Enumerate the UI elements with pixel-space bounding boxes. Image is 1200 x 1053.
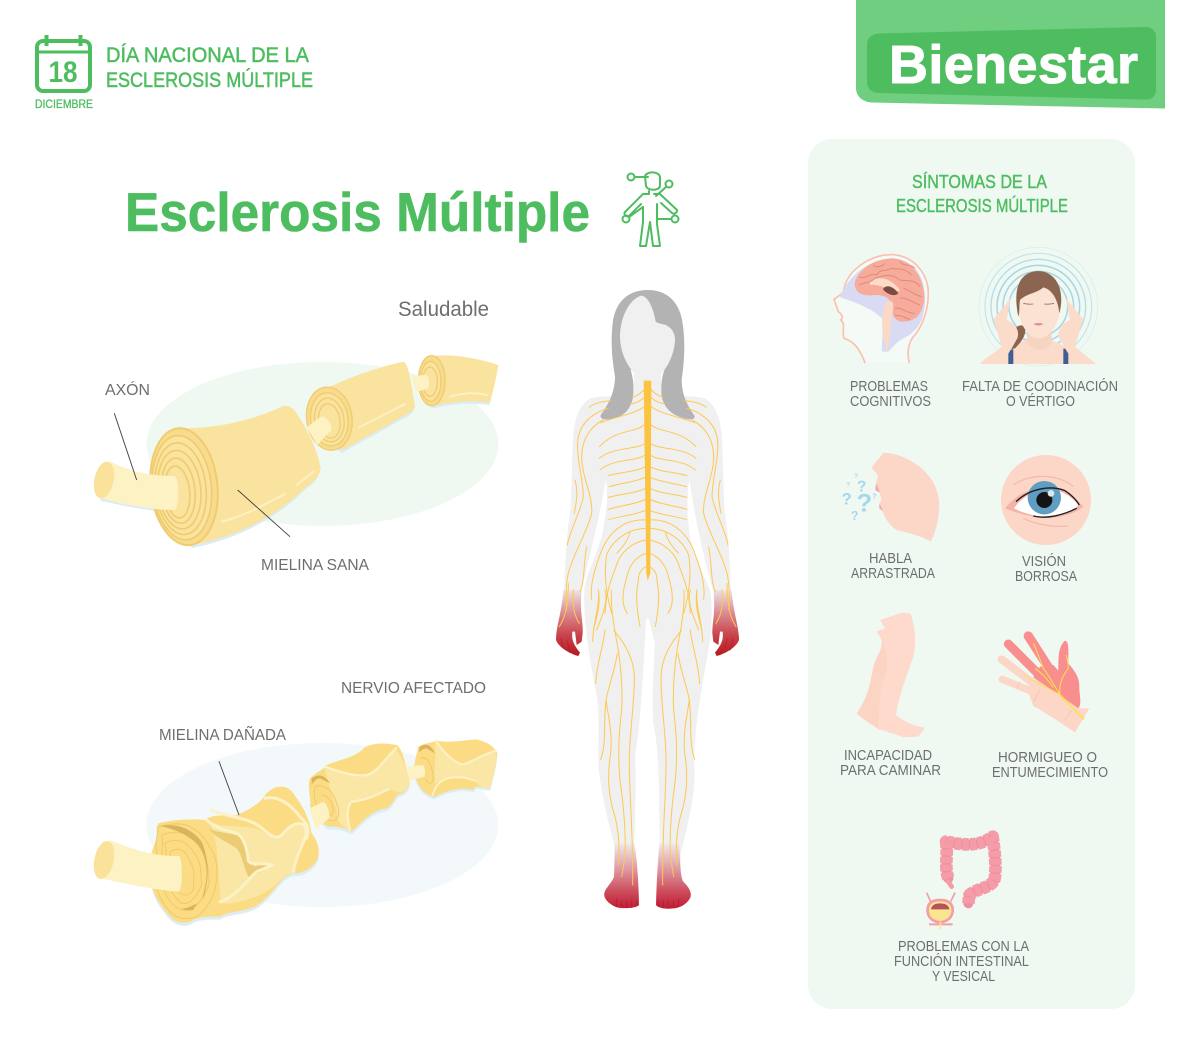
spine	[644, 381, 651, 581]
illustration: damaged nerve	[91, 739, 498, 926]
logo: Bienestar tab: Bienestar	[889, 35, 1138, 95]
icon: slurred speech: ?	[854, 473, 858, 480]
label: affected nerve: NERVIO AFECTADO	[341, 680, 486, 697]
panel: symptoms	[808, 139, 1135, 1009]
illustration: female body with nervous system	[556, 290, 739, 909]
arm nerves	[589, 401, 611, 407]
icon: blurred eye	[1001, 455, 1091, 545]
label: blurred vision: VISIÓN	[1022, 553, 1066, 570]
label: bowel and bladder: PROBLEMAS CON LA	[898, 938, 1029, 955]
label: slurred speech	[851, 550, 935, 582]
label: inability to walk	[840, 747, 941, 779]
label: coordination or vertigo: FALTA DE COODINACIÓN	[962, 378, 1118, 395]
face	[620, 296, 675, 380]
label: bowel and bladder	[894, 938, 1029, 985]
label: inability to walk: INCAPACIDAD	[844, 747, 932, 764]
label: tingling or numbness: HORMIGUEO O	[998, 749, 1097, 766]
feet	[604, 843, 639, 908]
label: month: DICIEMBRE	[35, 97, 93, 111]
heading: national day: ESCLEROSIS MÚLTIPLE	[106, 69, 313, 92]
segment 2	[309, 747, 410, 835]
body silhouette	[564, 373, 731, 873]
icon: slurred speech: ?	[842, 490, 852, 509]
icon: colon and bladder	[927, 837, 995, 929]
label: blurred vision	[1015, 553, 1077, 585]
segment 1	[176, 409, 319, 548]
label: bowel and bladder: Y VESICAL	[932, 968, 995, 985]
icon: slurred speech	[842, 453, 939, 542]
label: damaged myelin: MIELINA DAÑADA	[159, 724, 286, 744]
label: cognitive problems: COGNITIVOS	[850, 393, 931, 410]
panel heading: SÍNTOMAS DE LA	[912, 172, 1047, 192]
label: coordination or vertigo: O VÉRTIGO	[1006, 393, 1075, 410]
segment 1	[150, 790, 319, 926]
header: awareness day	[35, 35, 313, 111]
segment 3	[422, 358, 498, 408]
title: Esclerosis Múltiple	[125, 181, 590, 243]
icon: slurred speech: ?	[857, 478, 866, 495]
label: healthy myelin: MIELINA SANA	[261, 557, 369, 574]
panel heading	[896, 172, 1068, 216]
label: coordination or vertigo	[962, 378, 1118, 410]
icon: slurred speech: ?	[847, 483, 851, 489]
hands	[556, 590, 583, 656]
heading: national day: DÍA NACIONAL DE LA	[106, 44, 309, 67]
label: cognitive problems: PROBLEMAS	[850, 378, 928, 395]
label: blurred vision: BORROSA	[1015, 568, 1077, 585]
label: bowel and bladder: FUNCIÓN INTESTINAL	[894, 953, 1029, 970]
label: tingling or numbness	[992, 749, 1108, 781]
colon	[946, 837, 995, 903]
segment 3	[413, 742, 497, 800]
icon: hand with nerves	[1002, 636, 1089, 732]
icon: slurred speech: ?	[851, 509, 859, 523]
nerve branches: left half	[559, 388, 647, 885]
icon: slurred speech: ?	[857, 489, 872, 517]
icon: legs	[857, 613, 925, 737]
bladder	[927, 893, 955, 929]
label: saludable: Saludable	[398, 298, 489, 321]
label: slurred speech: HABLA	[869, 550, 912, 567]
neck	[634, 370, 661, 397]
icon: head with vertigo rings	[979, 247, 1098, 366]
panel heading: ESCLEROSIS MÚLTIPLE	[896, 195, 1068, 216]
logo: Bienestar tab	[856, 0, 1165, 108]
label: slurred speech: ARRASTRADA	[851, 565, 935, 582]
icon: person with nodes	[622, 172, 678, 246]
label: inability to walk: PARA CAMINAR	[840, 762, 941, 779]
heading: national day	[106, 44, 313, 92]
icon: brain in head	[834, 255, 928, 363]
illustration: healthy nerve	[91, 355, 498, 548]
label: cognitive problems	[850, 378, 931, 410]
icon: slurred speech: ?	[872, 492, 877, 501]
segment 2	[319, 365, 414, 453]
nerve branches: right half	[649, 388, 736, 885]
leg nerves	[611, 590, 625, 877]
hair	[601, 290, 695, 419]
icon: calendar 18	[37, 35, 90, 91]
label: tingling or numbness: ENTUMECIMIENTO	[992, 764, 1108, 781]
label: axon: AXÓN	[105, 380, 150, 399]
icon: calendar 18: 18	[48, 56, 78, 89]
